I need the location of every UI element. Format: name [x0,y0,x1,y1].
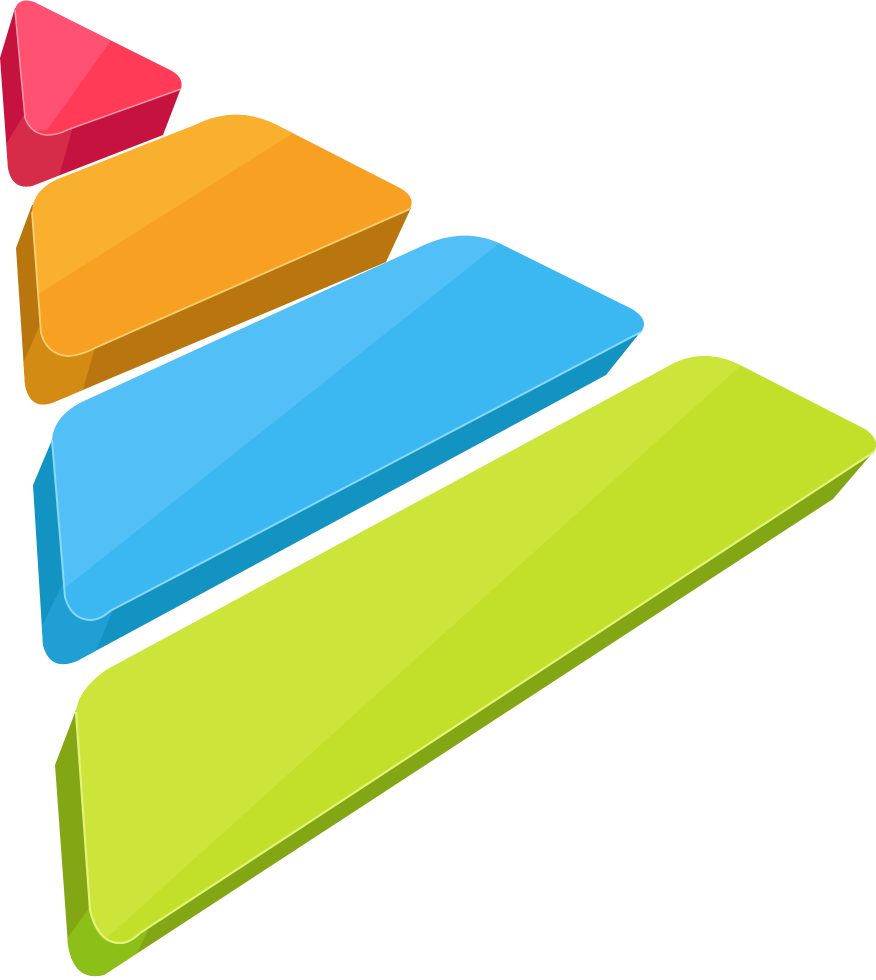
blue side wall [33,334,639,664]
panel: green bottom tier [55,356,876,976]
blue top face [52,236,644,619]
blue edge highlight [52,332,641,620]
red edge highlight [15,10,181,135]
red top face [15,0,182,134]
green edge highlight [76,452,874,943]
green top face [76,356,876,942]
red side wall [0,8,180,187]
green side wall [0,440,876,980]
orange side wall [16,205,411,404]
orange edge highlight [32,209,410,356]
panel: red top tier [0,0,182,187]
orange top face [32,114,412,355]
panel: blue third tier [33,236,644,664]
panel: orange second tier [16,114,412,404]
